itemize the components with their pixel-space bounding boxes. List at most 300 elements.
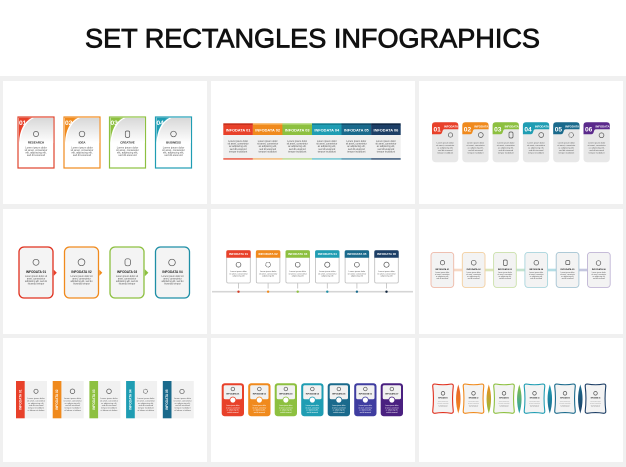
tab card 03 <box>493 122 519 162</box>
card 04 business: 04 <box>156 120 164 127</box>
column 05: sed dit eiusmod <box>348 148 365 151</box>
two-tone card 05: sed dit eiusmod <box>333 411 345 414</box>
card 01 research: Lorem ipsum dolor <box>25 145 47 149</box>
column 03: sit amet, consetetur <box>287 143 308 146</box>
vertical card 03: ac adipiscing elit, <box>101 402 117 405</box>
tab card 05: ac adipiscing elit, <box>558 146 575 150</box>
pinched card 06 <box>585 384 606 413</box>
timeline card 01: Lorem ipsum dolor <box>230 271 247 273</box>
column 04: tempor incididunt <box>318 150 336 153</box>
card 04 business: sed dit eiusmod <box>164 153 183 157</box>
card 01 research: RESEARCH <box>28 141 44 145</box>
linked card 06: ac adipiscing elit, <box>592 275 606 278</box>
vertical card 01: sed dit eiusmod <box>29 404 44 407</box>
column 05: ac adipiscing elit, <box>347 145 366 148</box>
linked card 04: ac adipiscing elit, <box>530 275 543 278</box>
two-tone card 07: sit amet, consetetur <box>385 406 399 409</box>
card 04 business <box>156 117 192 168</box>
timeline card 01: INFODATA 01 <box>229 252 248 256</box>
tab card 02: sed dit eiusmod <box>468 149 484 152</box>
vertical card 02: INFODATA 02 <box>55 389 59 410</box>
timeline card 01: adipiscing elit <box>232 275 245 278</box>
linked card 04: sit amet, consetetur <box>529 273 544 276</box>
pinched card 06: sit amet, consetetur <box>590 401 602 404</box>
timeline card 06: INFODATA 06 <box>377 252 396 256</box>
two-tone card 05: ac adipiscing elit, <box>333 409 345 412</box>
column 06: ac adipiscing elit, <box>377 145 395 148</box>
linked card 02 <box>462 252 485 287</box>
two-tone card 07: Lorem ipsum dolor <box>385 405 399 407</box>
outlined card 01: adipiscing elit, sed do <box>25 280 48 283</box>
panel: vertical label cards <box>3 338 207 462</box>
linked card 01: sit amet, consetetur <box>435 273 450 276</box>
card 02 idea: Lorem ipsum dolor <box>71 145 93 149</box>
two-tone card 01: ac adipiscing elit, <box>227 409 239 412</box>
card 04 business: sit amet, consetetur <box>162 148 185 152</box>
pinched card 05 <box>555 384 575 413</box>
linked card 06: Lorem ipsum dolor <box>592 271 606 274</box>
tab card 05: sed dit eiusmod <box>559 149 574 152</box>
timeline card 01: sit amet, consectetur <box>229 272 248 275</box>
tab card 04: 04 <box>524 127 532 134</box>
two-tone card 04: INFODATA 04 <box>306 392 320 396</box>
two-tone card 01: sit amet, consetetur <box>226 406 240 409</box>
pinched card 02 <box>463 384 484 413</box>
tab card 02: sit amet, consetetur <box>466 144 485 147</box>
outlined card 02: amet, consectetur <box>72 278 91 280</box>
linked card 02: INFODATA 02 <box>467 268 481 271</box>
tab card 02: 02 <box>464 127 471 134</box>
two-tone card 03: INFODATA 03 <box>279 392 293 396</box>
outlined card 01: INFODATA 01 <box>26 270 46 274</box>
column 05: Lorem ipsum dolor <box>346 140 366 143</box>
panel: six column table <box>211 81 415 204</box>
linked card 01 <box>431 252 454 287</box>
vertical card 04: Lorem ipsum dolor <box>137 397 155 400</box>
timeline card 05: sit amet, consectetur <box>348 272 366 275</box>
outlined card 03: INFODATA 03 <box>117 270 137 274</box>
tab card 06: sed dit eiusmod <box>589 149 605 152</box>
card 03 creative: sed dit eiusmod <box>118 153 137 157</box>
two-tone card 05: INFODATA 05 <box>332 392 346 396</box>
column 04: sed dit eiusmod <box>318 148 336 151</box>
timeline card 04: sit amet, consectetur <box>318 272 337 275</box>
tab card 04: Lorem ipsum dolor <box>527 142 545 144</box>
linked card 02: Lorem ipsum dolor <box>467 271 481 274</box>
vertical card 05 <box>163 381 194 418</box>
tab card 06: INFODATA <box>595 125 610 129</box>
column 04 <box>312 123 342 160</box>
tab card 04: sed dit eiusmod <box>529 149 544 152</box>
vertical card 03: sed dit eiusmod <box>102 404 117 407</box>
vertical card 02: ut labore et dolore <box>64 409 82 412</box>
tab card 02: tempor incididunt <box>468 152 484 154</box>
timeline card 04: adipiscing elit <box>321 275 334 278</box>
tab card 05 <box>553 122 580 162</box>
two-tone card 06 <box>354 383 376 416</box>
outlined card 03: eiusmod tempor <box>119 282 135 286</box>
vertical card 03: Lorem ipsum dolor <box>100 397 118 400</box>
vertical card 04: sed dit eiusmod <box>139 404 154 407</box>
vertical card 02: Lorem ipsum dolor <box>64 397 81 400</box>
pinched card 03 <box>494 384 514 413</box>
two-tone card 03: sed dit eiusmod <box>280 411 292 414</box>
linked card 06: sit amet, consetetur <box>591 273 607 276</box>
linked card 05: sit amet, consetetur <box>560 273 575 276</box>
tab card 03: tempor incididunt <box>498 152 514 154</box>
column 06: sed dit eiusmod <box>378 148 395 151</box>
pinched card 06: sed dit eiusmod <box>591 405 600 408</box>
pinched card 04: INFODATA 04 <box>530 397 539 400</box>
two-tone card 02: ac adipiscing elit, <box>253 409 266 412</box>
column 06: INFODATA 06 <box>374 128 399 133</box>
arrow 3 <box>145 269 148 276</box>
linked card 03: INFODATA 03 <box>498 268 513 271</box>
tab card 06 <box>584 122 610 162</box>
tab card 03: INFODATA <box>505 125 519 129</box>
card 04 business: elit, adipiscing elit, <box>163 151 184 155</box>
vertical card 04: ac adipiscing elit, <box>138 402 154 405</box>
pinched card 02: sed dit eiusmod <box>469 405 478 408</box>
vertical card 02: ac adipiscing elit, <box>65 402 81 405</box>
column 04: Lorem ipsum dolor <box>317 140 337 143</box>
lens divider 3 <box>517 384 522 414</box>
pinched card 06: Lorem ipsum dolor <box>590 400 601 402</box>
linked card 03 <box>494 252 516 287</box>
card 03 creative: elit, adipiscing elit, <box>117 151 138 155</box>
tab card 06: 06 <box>585 127 593 134</box>
pinched card 06: INFODATA 06 <box>591 397 600 400</box>
vertical card 04: ut labore et dolore <box>137 409 155 412</box>
pinched card 02: INFODATA 02 <box>469 397 478 400</box>
two-tone card 01: sed dit eiusmod <box>227 411 239 414</box>
column 02: sed dit eiusmod <box>259 148 277 151</box>
pinched card 05: INFODATA 05 <box>560 397 570 400</box>
card 03 creative: CREATIVE <box>120 141 135 145</box>
card 01 research: sed dit eiusmod <box>27 153 46 157</box>
timeline card 06: Lorem ipsum dolor <box>378 271 395 273</box>
two-tone card 06: Lorem ipsum dolor <box>359 405 372 407</box>
outlined card 03: Lorem ipsum dolor sit <box>116 275 138 278</box>
timeline card 06: sit amet, consectetur <box>377 272 396 275</box>
tab card 04: sit amet, consetetur <box>527 144 545 147</box>
card 03 creative: sit amet, consetetur <box>116 148 139 152</box>
linked card 04: Lorem ipsum dolor <box>529 271 544 274</box>
pinched card 04: sit amet, consetetur <box>529 401 541 404</box>
outlined card 04: INFODATA 04 <box>162 270 183 274</box>
linked card 02: sit amet, consetetur <box>466 273 481 276</box>
vertical card 01: tempor incididunt <box>28 407 44 410</box>
tab card 03: sed dit eiusmod <box>499 149 514 152</box>
tab card 01 <box>432 122 458 162</box>
pinched card 04: sed dit eiusmod <box>530 405 539 408</box>
vertical card 05: tempor incididunt <box>175 407 191 410</box>
column 02 <box>253 123 282 160</box>
pinched card 05: sed dit eiusmod <box>561 405 570 408</box>
title: SET RECTANGLES INFOGRAPHICS <box>85 24 540 54</box>
tab card 02 <box>462 122 489 162</box>
panel: pinched cards with lens dividers <box>419 338 623 462</box>
outlined card 02: adipiscing elit, sed do <box>71 280 93 283</box>
timeline card 05: adipiscing elit <box>351 275 363 278</box>
column 01: INFODATA 01 <box>226 128 251 133</box>
pinched card 01: INFODATA 01 <box>438 397 448 400</box>
linked card 02: ac adipiscing elit, <box>467 275 481 278</box>
linked card 01: sed dit eiusmod <box>436 277 448 280</box>
outlined card 03 <box>110 247 144 298</box>
vertical card 03 <box>89 381 120 418</box>
vertical card 04 <box>126 381 157 418</box>
panel: seven two-tone cards <box>211 338 415 462</box>
vertical card 04: tempor incididunt <box>138 407 154 410</box>
pinched card 03: ac adipiscing elit, <box>499 403 509 406</box>
two-tone card 07 <box>381 383 403 416</box>
pinched card 01 <box>433 384 453 413</box>
vertical card 01: ut labore et dolore <box>28 409 45 412</box>
timeline card 03: adipiscing elit <box>292 275 304 278</box>
two-tone card 06: sit amet, consetetur <box>358 406 373 409</box>
tab card 01: tempor incididunt <box>437 152 454 154</box>
timeline card 02: sit amet, consectetur <box>259 272 278 275</box>
timeline card 06: adipiscing elit <box>380 275 393 278</box>
two-tone card 01: Lorem ipsum dolor <box>226 405 240 407</box>
tab card 06: Lorem ipsum dolor <box>588 142 606 144</box>
outlined card 03: amet, consectetur <box>118 278 136 280</box>
pinched card 03: Lorem ipsum dolor <box>499 400 510 402</box>
linked card 03: ac adipiscing elit, <box>498 275 512 278</box>
column 05: sit amet, consetetur <box>346 143 367 146</box>
timeline card 03: Lorem ipsum dolor <box>289 271 306 273</box>
two-tone card 05: Lorem ipsum dolor <box>332 405 346 407</box>
timeline card 03 <box>286 250 310 293</box>
tab card 02: INFODATA <box>474 125 488 129</box>
two-tone card 07: sed dit eiusmod <box>386 411 398 414</box>
pinched card 06: ac adipiscing elit, <box>591 403 601 406</box>
timeline card 03: INFODATA 03 <box>288 252 308 256</box>
timeline card 06 <box>374 250 399 293</box>
linked card 06: INFODATA 06 <box>592 268 607 271</box>
tab card 04: tempor incididunt <box>528 152 544 154</box>
two-tone card 01 <box>222 383 244 416</box>
timeline card 04: INFODATA 04 <box>318 252 337 256</box>
pinched card 04 <box>524 384 545 413</box>
column 05 <box>342 123 371 160</box>
outlined card 02 <box>64 247 98 298</box>
linked card 02: sed dit eiusmod <box>468 277 480 280</box>
panel: six tabbed grey cards <box>419 81 623 204</box>
linked card 06 <box>588 252 610 287</box>
two-tone card 02: sed dit eiusmod <box>254 411 265 414</box>
vertical card 03: ut labore et dolore <box>101 409 118 412</box>
card 03 creative <box>110 117 146 168</box>
panel: timeline cards <box>211 209 415 334</box>
lens divider 5 <box>578 384 583 414</box>
two-tone card 04: sed dit eiusmod <box>307 411 318 414</box>
two-tone card 05 <box>328 383 350 416</box>
two-tone card 02: Lorem ipsum dolor <box>253 405 266 407</box>
column 02: sit amet, consetetur <box>257 143 278 146</box>
timeline card 03: sit amet, consectetur <box>288 272 307 275</box>
tab card 05: INFODATA <box>565 125 579 129</box>
outlined card 04: eiusmod tempor <box>164 282 181 286</box>
tab card 06: sit amet, consetetur <box>588 144 606 147</box>
outlined card 04 <box>156 247 190 298</box>
vertical card 02: sit amet, consetetur <box>63 399 82 402</box>
vertical card 05: Lorem ipsum dolor <box>174 397 191 400</box>
vertical card 02: sed dit eiusmod <box>65 404 81 407</box>
timeline card 02: Lorem ipsum dolor <box>260 271 277 273</box>
two-tone card 02 <box>248 383 270 416</box>
two-tone card 03: Lorem ipsum dolor <box>279 405 293 407</box>
outlined card 04: Lorem ipsum dolor sit <box>162 275 184 278</box>
vertical card 01: ac adipiscing elit, <box>28 402 44 405</box>
tab card 01: Lorem ipsum dolor <box>437 142 454 144</box>
pinched card 05: sit amet, consetetur <box>560 401 571 404</box>
two-tone card 04: ac adipiscing elit, <box>306 409 319 412</box>
card 02 idea: sit amet, consetetur <box>71 148 93 152</box>
vertical card 05: sit amet, consetetur <box>173 399 192 402</box>
linked card 03: sed dit eiusmod <box>499 277 511 280</box>
card 01 research: elit, adipiscing elit, <box>25 151 47 155</box>
lens divider 4 <box>548 384 552 414</box>
vertical card 03: sit amet, consetetur <box>100 399 118 402</box>
column 05: tempor incididunt <box>347 150 366 153</box>
two-tone card 07: INFODATA 07 <box>385 392 399 396</box>
vertical card 01: INFODATA 01 <box>18 389 22 410</box>
pinched card 05: ac adipiscing elit, <box>560 403 570 406</box>
tab card 03: 03 <box>494 127 502 134</box>
linked card 03: sit amet, consetetur <box>498 273 513 276</box>
vertical card 05: sed dit eiusmod <box>175 404 191 407</box>
vertical card 05: INFODATA 05 <box>165 389 169 410</box>
tab card 01: INFODATA <box>444 125 458 129</box>
outlined card 02: Lorem ipsum dolor sit <box>71 275 93 278</box>
two-tone card 01: INFODATA 01 <box>226 392 240 396</box>
column 02: ac adipiscing elit, <box>259 145 277 148</box>
column 03: Lorem ipsum dolor <box>287 140 307 143</box>
timeline card 01 <box>226 250 251 293</box>
timeline card 02 <box>256 250 280 293</box>
tab card 01: sit amet, consetetur <box>436 144 455 147</box>
tab card 02: ac adipiscing elit, <box>468 146 484 150</box>
linked card 03: Lorem ipsum dolor <box>498 271 512 274</box>
linked card 04 <box>525 252 548 287</box>
panel: four numbered cards <box>3 81 207 204</box>
linked card 01: Lorem ipsum dolor <box>435 271 450 274</box>
outlined card 01: Lorem ipsum dolor sit <box>25 275 47 278</box>
two-tone card 04: Lorem ipsum dolor <box>306 405 319 407</box>
tab card 01: ac adipiscing elit, <box>437 146 454 150</box>
linked card 05: ac adipiscing elit, <box>561 275 574 278</box>
vertical card 02: tempor incididunt <box>65 407 81 410</box>
arrow 1 <box>54 270 57 276</box>
tab card 03: Lorem ipsum dolor <box>497 142 515 144</box>
vertical card 01: Lorem ipsum dolor <box>27 397 45 400</box>
vertical card 03: INFODATA 03 <box>92 389 96 410</box>
column 06 <box>371 123 401 160</box>
tab card 01: sed dit eiusmod <box>438 149 453 152</box>
column 04: ac adipiscing elit, <box>318 145 336 148</box>
column 01 <box>223 123 253 160</box>
card 03 creative: 03 <box>110 120 118 127</box>
pinched card 05: Lorem ipsum dolor <box>560 400 571 402</box>
outlined card 04: adipiscing elit, sed do <box>162 280 184 283</box>
vertical card 01: sit amet, consetetur <box>27 399 45 402</box>
two-tone card 06: ac adipiscing elit, <box>359 409 372 412</box>
vertical card 01 <box>16 381 47 418</box>
timeline card 02: adipiscing elit <box>262 275 275 278</box>
pinched card 02: Lorem ipsum dolor <box>468 400 479 402</box>
card 01 research: 01 <box>19 120 27 127</box>
vertical card 05: ac adipiscing elit, <box>175 402 191 405</box>
card 02 idea: 02 <box>65 120 73 127</box>
arrow 2 <box>99 270 102 276</box>
column 01: ac adipiscing elit, <box>229 145 248 148</box>
linked card 01: ac adipiscing elit, <box>436 275 449 278</box>
timeline card 04 <box>315 250 340 293</box>
outlined card 01 <box>19 247 53 298</box>
column 03: INFODATA 03 <box>285 128 310 133</box>
column 04: sit amet, consetetur <box>316 143 337 146</box>
outlined card 01: eiusmod tempor <box>28 282 44 286</box>
pinched card 01: ac adipiscing elit, <box>438 403 448 406</box>
panel: four outlined cards with arrows <box>3 209 207 334</box>
tab card 01: 01 <box>434 127 441 134</box>
lens divider 2 <box>487 384 491 414</box>
two-tone card 04 <box>301 383 324 416</box>
outlined card 02: eiusmod tempor <box>73 282 90 286</box>
column 02: Lorem ipsum dolor <box>258 140 278 143</box>
vertical card 03: tempor incididunt <box>101 407 117 410</box>
linked card 01: INFODATA 01 <box>435 268 450 271</box>
outlined card 01: amet, consectetur <box>27 278 45 280</box>
two-tone card 02: INFODATA 02 <box>253 392 267 396</box>
outlined card 04: amet, consectetur <box>163 278 182 280</box>
vertical card 05: ut labore et dolore <box>174 409 192 412</box>
pinched card 01: sed dit eiusmod <box>439 405 448 408</box>
card 01 research <box>18 117 54 168</box>
column 05: INFODATA 05 <box>344 128 370 133</box>
pinched card 03: INFODATA 03 <box>499 397 509 400</box>
column 03: ac adipiscing elit, <box>288 145 307 148</box>
column 03: sed dit eiusmod <box>289 148 306 151</box>
tab card 04 <box>523 122 549 162</box>
linked card 05: INFODATA 05 <box>561 268 575 271</box>
column 06: sit amet, consetetur <box>375 143 397 146</box>
linked card 06: sed dit eiusmod <box>593 277 605 280</box>
two-tone card 06: INFODATA 06 <box>359 392 373 396</box>
card 03 creative: Lorem ipsum dolor <box>117 145 138 149</box>
pinched card 01: sit amet, consetetur <box>438 401 449 404</box>
tab card 05: sit amet, consetetur <box>557 144 576 147</box>
panel: pale linked cards <box>419 209 623 334</box>
column 03 <box>282 123 312 160</box>
vertical card 04: sit amet, consetetur <box>137 399 155 402</box>
two-tone card 05: sit amet, consetetur <box>332 406 346 409</box>
two-tone card 03: sit amet, consetetur <box>279 406 293 409</box>
tab card 03: sit amet, consetetur <box>497 144 515 147</box>
pinched card 04: ac adipiscing elit, <box>530 403 540 406</box>
pinched card 02: ac adipiscing elit, <box>469 403 479 406</box>
timeline card 02: INFODATA 02 <box>259 252 278 256</box>
card 02 idea: elit, adipiscing elit, <box>71 151 93 155</box>
two-tone card 06: sed dit eiusmod <box>360 411 371 414</box>
two-tone card 02: sit amet, consetetur <box>252 406 267 409</box>
pinched card 03: sit amet, consetetur <box>499 401 510 404</box>
linked card 04: sed dit eiusmod <box>530 277 542 280</box>
timeline card 05 <box>345 250 369 293</box>
card 01 research: sit amet, consetetur <box>25 148 47 152</box>
